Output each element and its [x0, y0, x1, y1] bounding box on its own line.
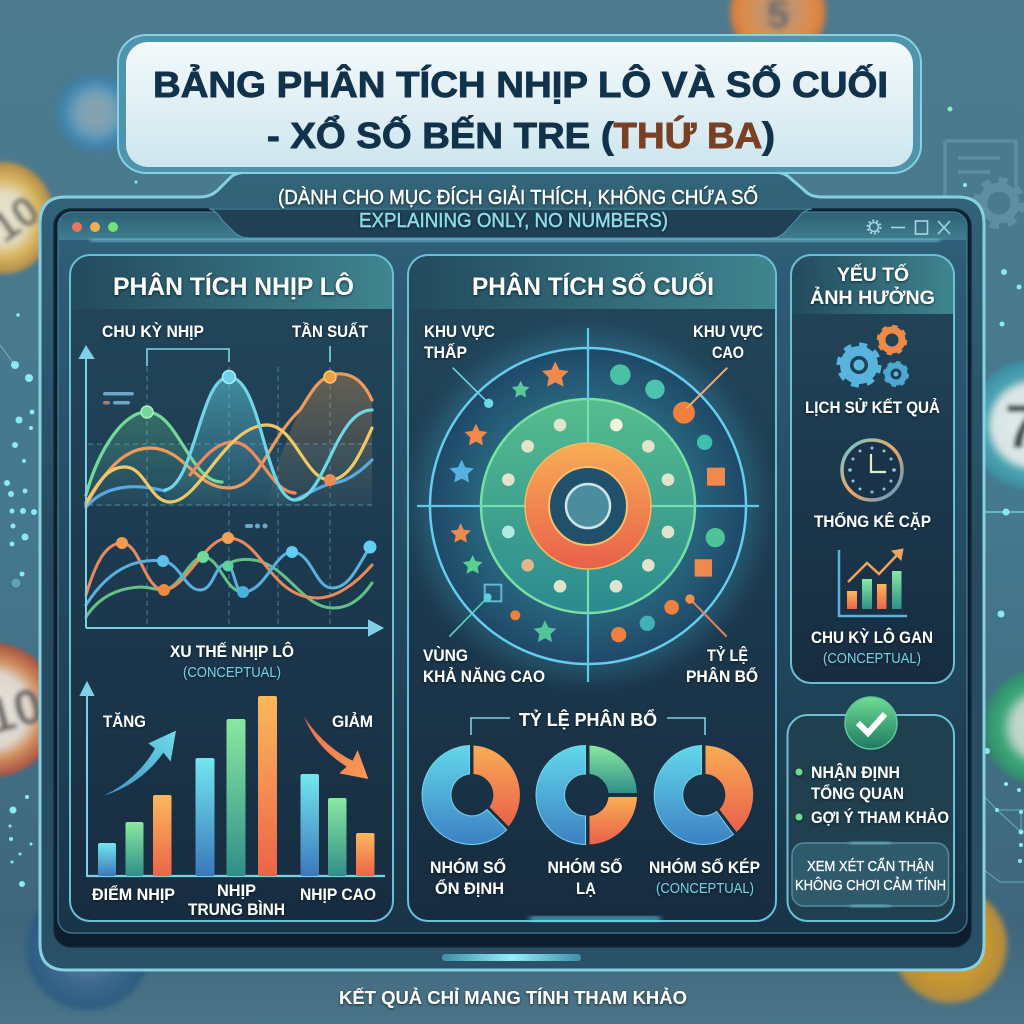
arrow: up trend	[103, 731, 176, 796]
panel: phân tích số cuối	[408, 255, 776, 921]
label: thống kê cặp: THỐNG KÊ CẶP	[814, 511, 931, 531]
top markers	[141, 370, 336, 486]
icon: bar and trend chart	[839, 549, 907, 616]
donut labels: NHÓM SỐ KÉP	[649, 857, 760, 877]
panel: yếu tố ảnh hưởng	[791, 255, 954, 683]
chart axes	[80, 347, 382, 635]
bar chart labels: ĐIỂM NHỊP	[92, 885, 175, 904]
bar chart labels: TĂNG	[103, 712, 146, 731]
bar chart labels: NHỊP CAO	[300, 885, 376, 904]
subtitle: (DÀNH CHO MỤC ĐÍCH GIẢI THÍCH, KHÔNG CHỨA SỐ	[278, 185, 758, 209]
subtitle	[278, 185, 758, 232]
chart caption	[170, 642, 294, 681]
donut labels: LẠ	[576, 879, 596, 898]
radial labels: VÙNG	[423, 646, 468, 665]
donut labels: NHÓM SỐ	[430, 857, 506, 877]
summary bullets	[796, 763, 949, 827]
faint background icon: gear and document	[945, 141, 1022, 226]
donut chart 1	[422, 746, 520, 844]
summary bullets: TỔNG QUAN	[811, 784, 904, 803]
glow bottom	[530, 917, 660, 921]
bottom curves	[86, 538, 372, 617]
window title bar	[59, 213, 966, 240]
chart labels: TẦN SUẤT	[292, 322, 369, 341]
title box	[118, 35, 921, 173]
radial labels: KHU VỰC	[693, 322, 763, 341]
summary bullets: NHẬN ĐỊNH	[811, 763, 900, 782]
subtitle: EXPLAINING ONLY, NO NUMBERS)	[359, 210, 668, 232]
label: chu kỳ lô gan: CHU KỲ LÔ GAN	[811, 628, 933, 647]
chart labels: CHU KỲ NHỊP	[102, 322, 204, 341]
bar chart labels: TRUNG BÌNH	[188, 900, 285, 919]
radial markers	[450, 361, 725, 642]
arrow: down trend	[304, 717, 368, 779]
radial labels: THẤP	[424, 343, 467, 362]
mini legend	[103, 392, 268, 528]
label: chu kỳ lô gan: (CONCEPTUAL)	[823, 650, 921, 667]
window inner area	[58, 212, 967, 933]
radial labels	[423, 322, 763, 686]
chart caption: (CONCEPTUAL)	[183, 664, 281, 681]
label: lịch sử kết quả: LỊCH SỬ KẾT QUẢ	[805, 398, 940, 417]
line chart	[80, 322, 382, 635]
panel heading: YẾU TỐ	[837, 264, 909, 286]
donut labels: (CONCEPTUAL)	[656, 880, 754, 897]
panel heading	[810, 264, 935, 309]
donut chart 3	[654, 746, 753, 844]
section heading: tỷ lệ phân bổ	[471, 709, 705, 735]
main window frame	[40, 172, 984, 970]
radial labels: TỶ LỆ	[707, 646, 748, 665]
panel heading: PHÂN TÍCH NHỊP LÔ	[113, 271, 354, 301]
panel: nhận định	[788, 697, 954, 921]
frame bottom indicator bar	[442, 954, 581, 961]
chart labels	[102, 322, 369, 341]
bar chart labels: GIẢM	[332, 712, 373, 731]
footer note: KẾT QUẢ CHỈ MANG TÍNH THAM KHẢO	[339, 987, 687, 1008]
panel heading: ẢNH HƯỞNG	[810, 287, 935, 309]
donut chart 2	[536, 746, 637, 844]
panel heading: PHÂN TÍCH SỐ CUỐI	[472, 271, 714, 301]
window control dots	[72, 222, 118, 232]
bar chart	[81, 683, 385, 876]
window title tab	[209, 209, 812, 238]
area fills	[88, 374, 372, 506]
advice box: KHÔNG CHƠI CẢM TÍNH	[795, 877, 946, 894]
title text line 2: - XỔ SỐ BẾN TRE ( THỨ BA)	[267, 113, 775, 156]
donut labels: ỔN ĐỊNH	[435, 879, 504, 898]
advice box: XEM XÉT CẨN THẬN	[807, 857, 934, 875]
top curves	[86, 374, 372, 507]
section heading: tỷ lệ phân bổ: TỶ LỆ PHÂN BỔ	[519, 709, 657, 730]
icon: gears	[839, 326, 908, 386]
icon: check badge	[845, 697, 897, 749]
chart caption: XU THẾ NHỊP LÔ	[170, 642, 294, 661]
advice box	[792, 842, 948, 907]
bottom markers	[116, 532, 376, 598]
window control icons	[868, 220, 950, 234]
radial labels: PHÂN BỔ	[686, 667, 758, 686]
window dark base	[54, 209, 971, 947]
radial diagram	[416, 328, 760, 682]
panel: phân tích nhịp lô	[70, 255, 393, 921]
icon: clock	[842, 440, 902, 500]
bar chart labels	[92, 712, 376, 919]
radial labels: CAO	[712, 343, 744, 362]
bar chart labels: NHỊP	[217, 881, 256, 900]
background network lines	[0, 345, 1024, 882]
title text line 1: BẢNG PHÂN TÍCH NHỊP LÔ VÀ SỐ CUỐI	[153, 63, 888, 105]
donut labels: NHÓM SỐ	[548, 857, 622, 877]
summary bullets: GỢI Ý THAM KHẢO	[811, 808, 949, 827]
background particles	[4, 106, 1024, 887]
callout lines	[449, 368, 727, 637]
radial labels: KHẢ NĂNG CAO	[423, 667, 545, 686]
donut labels	[430, 857, 760, 898]
tab glow line	[90, 239, 940, 242]
radial labels: KHU VỰC	[424, 322, 495, 341]
label: chu kỳ lô gan	[811, 628, 933, 667]
